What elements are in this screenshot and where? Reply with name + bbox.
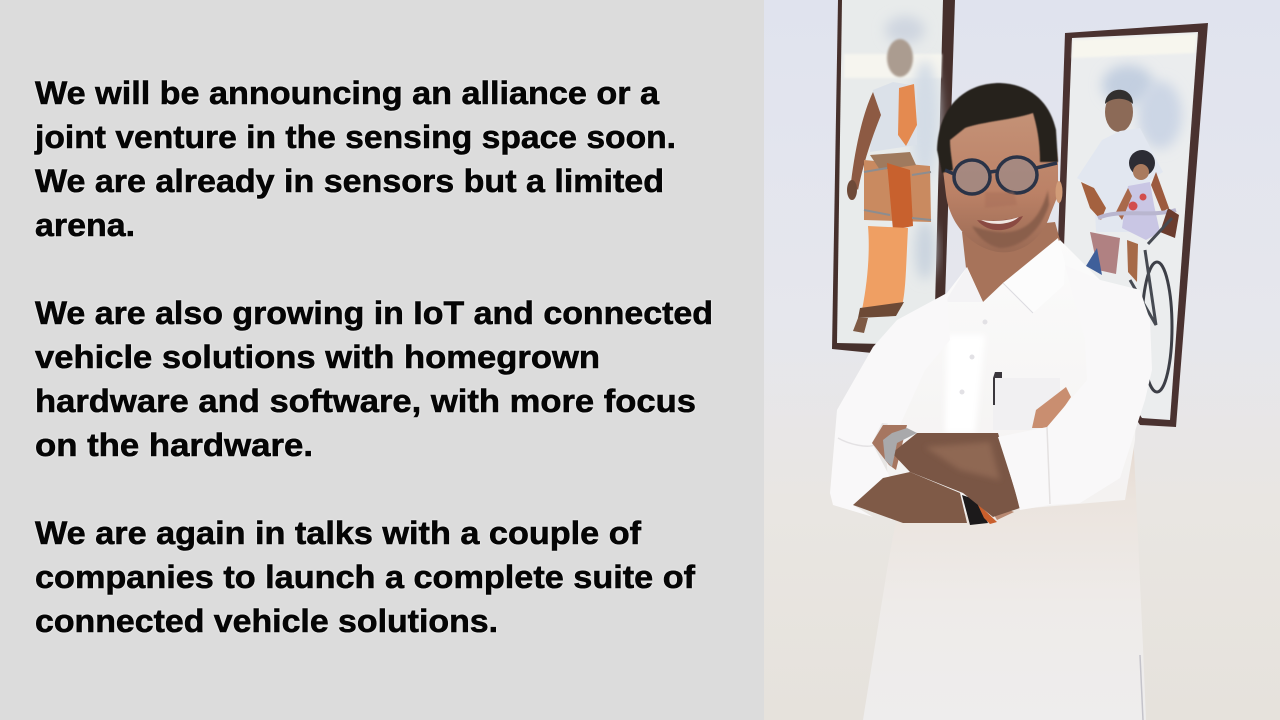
pen in pocket — [993, 372, 1002, 405]
child — [1129, 150, 1155, 176]
paragraph: talks with companies: companies to launch a complete suite of — [35, 559, 695, 595]
man — [830, 83, 1152, 720]
drum — [864, 160, 931, 222]
pocket — [993, 378, 1060, 430]
dhoti — [862, 226, 908, 310]
upper forearm — [892, 433, 1020, 517]
paragraph: IoT and connected vehicle growth: hardware and software, with more focus — [35, 383, 696, 419]
painting: drummer — [832, 0, 955, 360]
watch — [883, 428, 917, 467]
left sleeve (viewer's left) — [830, 293, 950, 517]
nose — [985, 192, 1017, 208]
hair — [937, 83, 1058, 173]
paragraph: talks with companies: We are again in talks with a couple of — [35, 515, 641, 551]
paragraph: sensing alliance: We will be announcing an alliance or a — [35, 75, 659, 111]
neck — [962, 222, 1060, 304]
wall background — [764, 0, 1280, 720]
paragraph: IoT and connected vehicle growth: on the hardware. — [35, 427, 313, 463]
shirt buttons — [960, 320, 988, 394]
fingers on arm — [1032, 387, 1071, 428]
lower forearm and band — [853, 472, 1014, 525]
drummer torso — [870, 82, 917, 152]
drummer head — [887, 39, 913, 77]
paragraph: sensing alliance: joint venture in the sensing space soon. — [34, 119, 676, 155]
photo: man in white kurta in front of paintings — [764, 0, 1280, 720]
collar — [945, 238, 1065, 313]
quote text — [34, 75, 713, 639]
rider — [1105, 92, 1133, 132]
ear — [1056, 181, 1062, 203]
mouth — [977, 216, 1023, 230]
painting: man and child on bicycle — [1056, 23, 1208, 427]
paragraph: talks with companies: connected vehicle solutions. — [35, 603, 498, 639]
head — [937, 83, 1062, 252]
paragraph: IoT and connected vehicle growth — [35, 295, 713, 463]
paragraph: sensing alliance: We are already in sensors but a limited — [35, 163, 664, 199]
hand at elbow — [872, 425, 907, 470]
panel: grey text background — [0, 0, 764, 720]
paragraph: sensing alliance: arena. — [35, 207, 135, 243]
kurta lower body — [863, 430, 1146, 720]
paragraph: talks with companies — [35, 515, 695, 639]
paragraph: IoT and connected vehicle growth: We are also growing in IoT and connected — [35, 295, 713, 331]
glasses — [954, 157, 1037, 194]
shirt torso — [885, 240, 1140, 520]
paragraph: sensing alliance — [34, 75, 676, 243]
paragraph: IoT and connected vehicle growth: vehicle solutions with homegrown — [35, 339, 600, 375]
right sleeve (viewer's right) — [998, 265, 1152, 510]
bicycle — [1098, 210, 1176, 218]
